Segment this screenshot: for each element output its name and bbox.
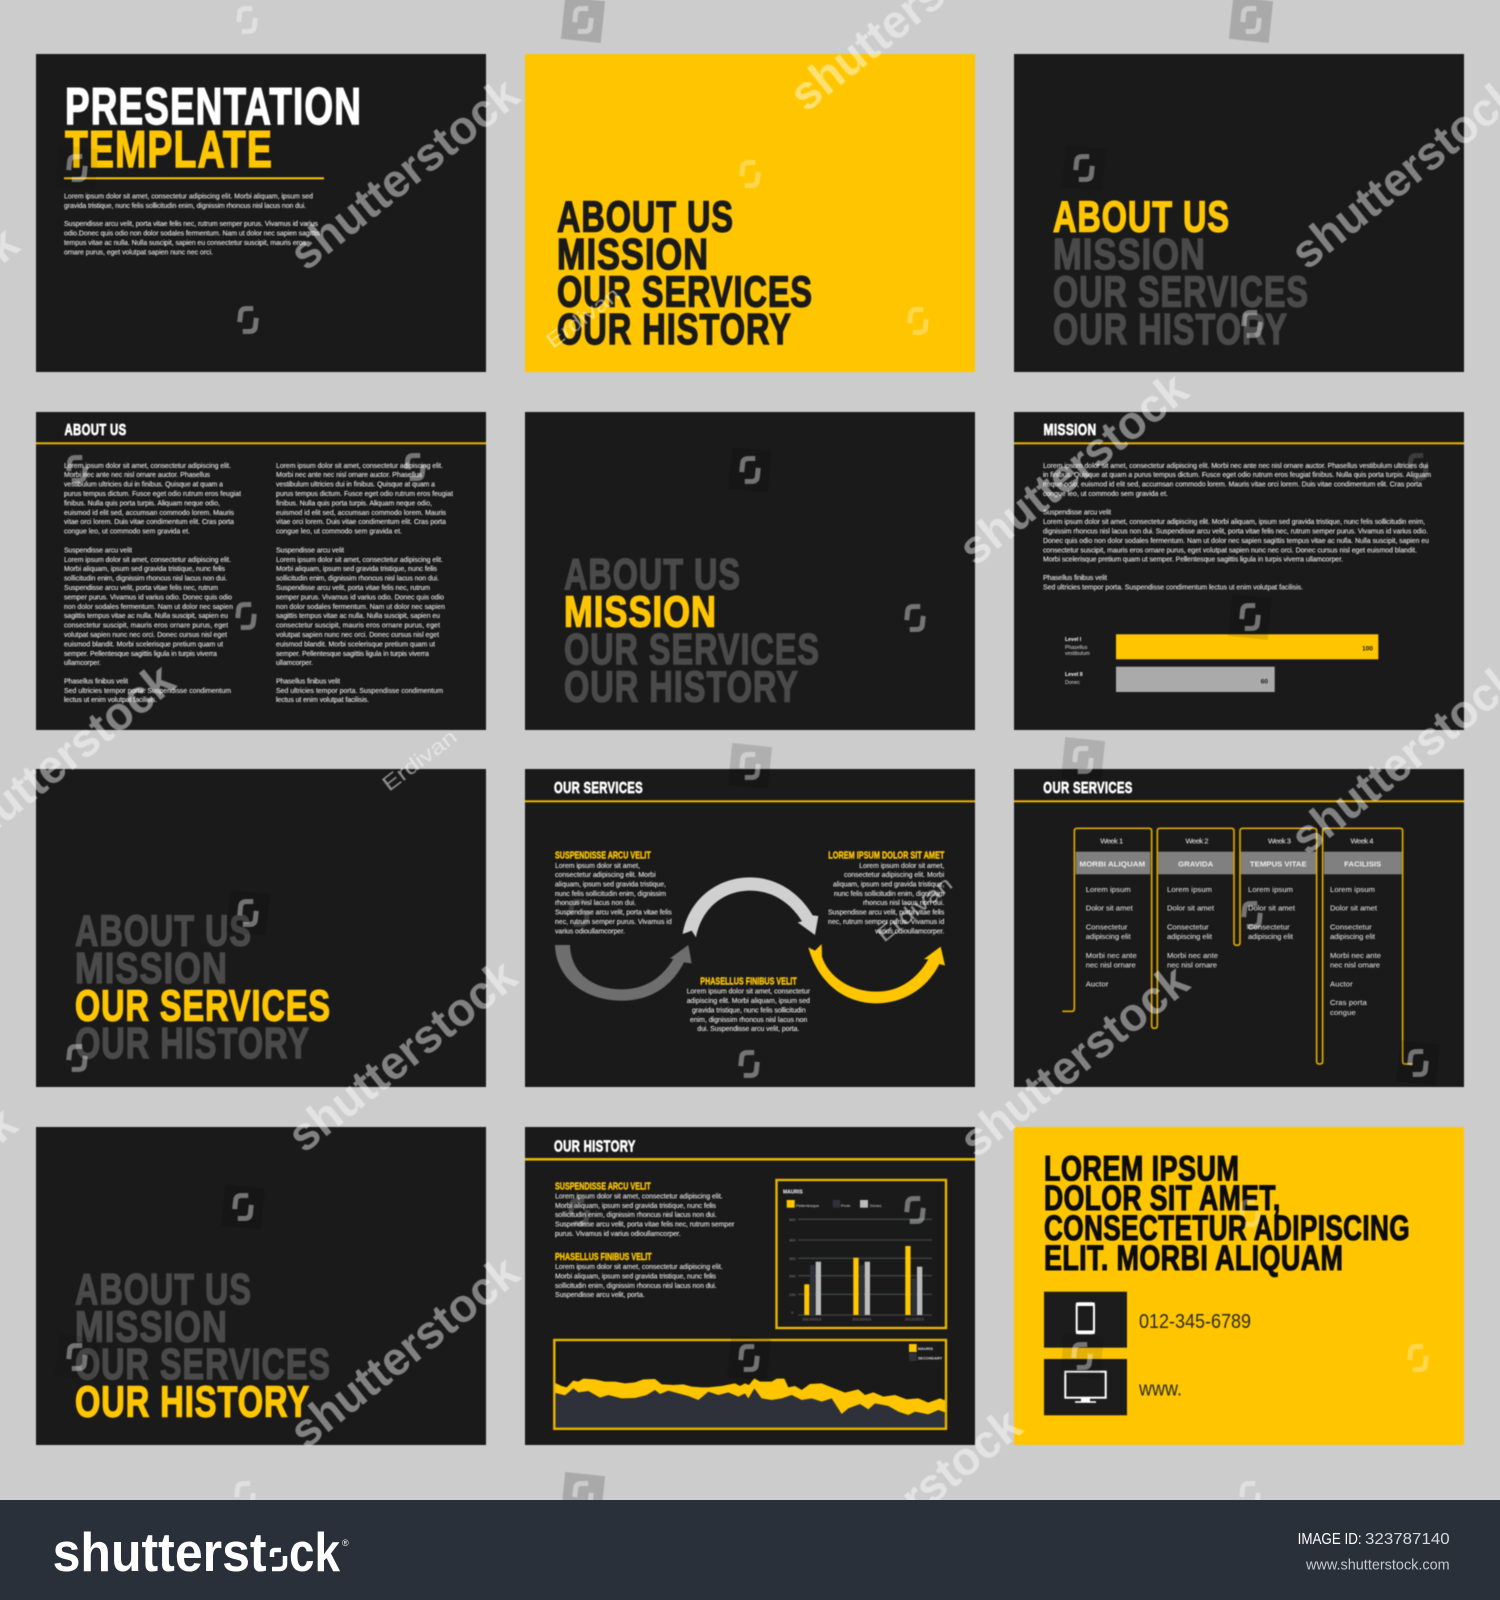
agenda list: MISSION <box>1053 230 1206 279</box>
text column 1: semper. Pellentesque sagittis ligula in turpis viverra <box>64 651 217 658</box>
mission text: Suspendisse arcu velit <box>1043 510 1111 516</box>
footer logo: ® <box>342 1538 349 1548</box>
intro text block: tempus vitae ac nulla. Nulla suscipit, sapien eu consectetur suscipit, mauris eros <box>64 240 307 247</box>
yellow week outline <box>1062 828 1413 1064</box>
text column 2: semper purus. Vivamus id varius odio. Donec quis odio <box>276 594 444 601</box>
mission text: dignissim rhoncus nisl lacus non dui. Suspendisse arcu velit, porta vitae felis nec, rutrum semper purus. Vivamus id varius odio. <box>1043 528 1428 536</box>
mission text: consectetur suscipit, mauris eros ornare purus, eget volutpat sapien nunc nec orci. Donec cursus nisl eget euismod blandit. <box>1043 547 1417 554</box>
agenda list: OUR HISTORY <box>1053 305 1288 354</box>
bar chart: levels: Donec <box>1065 680 1080 686</box>
text block: phasellus: Morbi aliquam, ipsum sed gravida tristique, nunc felis <box>555 1274 717 1280</box>
text block: suspendisse: varius odioullamcorper. <box>555 928 625 936</box>
title: presentation template: TEMPLATE <box>65 121 273 179</box>
text block: phasellus: sollicitudin enim, dignissim rhoncus nisl lacus non dui. <box>555 1283 717 1290</box>
agenda list: OUR SERVICES <box>75 1340 331 1389</box>
text column 2: Morbi aliquam, ipsum sed gravida tristique, nunc felis <box>276 566 438 573</box>
intro text block: gravida tristique, nunc felis sollicitudin enim, dignissim rhoncus nisl lacus non dui. <box>64 203 306 210</box>
bar chart: levels: Level II <box>1065 672 1083 678</box>
bar chart: mauris: 2012/2013 <box>905 1316 925 1322</box>
contact headline: LOREM IPSUM <box>1044 1150 1239 1188</box>
mission text: Sed ultricies tempor porta. Suspendisse condimentum lectus ut enim volutpat facilisis. <box>1043 584 1303 592</box>
text column 1: Lorem ipsum dolor sit amet, consectetur adipiscing elit. <box>64 557 231 564</box>
text block: phasellus: Suspendisse arcu velit, porta. <box>555 1292 645 1299</box>
bar chart: mauris: 100 <box>789 1292 796 1297</box>
text column 1: Morbi nec ante nec nisl ornare auctor. Phasellus <box>64 472 211 479</box>
mission text: Donec quis odio non dolor sodales fermentum. Nam ut dolor nec sapien sagittis tempus vitae ac nulla. Nulla suscipit, sapien eu <box>1043 538 1429 545</box>
panel: agenda our services highlighted <box>36 769 486 1087</box>
agenda list: MISSION <box>75 1302 228 1352</box>
week 1 column: Week 1 <box>1100 836 1123 846</box>
watermark layer: shutterstock <box>277 948 527 1162</box>
week 2 column: Lorem ipsum <box>1167 885 1212 894</box>
agenda list: OUR HISTORY <box>75 1019 310 1068</box>
text column 2: non dolor sodales fermentum. Nam ut dolor nec sapien <box>276 604 445 611</box>
intro text block <box>64 194 321 256</box>
image id: 323787140 <box>1365 1531 1450 1548</box>
watermark layer: shutterstock <box>949 953 1199 1167</box>
text block: phasellus <box>555 1252 723 1299</box>
watermark layer: shutterstock <box>279 66 529 280</box>
image id <box>1298 1531 1450 1548</box>
intro text block: odio.Donec quis odio non dolor sodales fermentum. Nam ut dolor nec sapien sagittis <box>64 230 321 237</box>
grey week header bands <box>1076 852 1402 874</box>
bar chart: levels: 100 <box>1362 645 1373 652</box>
text block: lorem ipsum: aliquam, ipsum sed gravida tristique, <box>833 882 944 888</box>
icon: phone <box>1044 1292 1127 1348</box>
website url: www.shutterstock.com <box>1305 1556 1450 1574</box>
text block: suspendisse: SUSPENDISSE ARCU VELIT <box>555 1182 651 1192</box>
text column 2: congue leo, ut commodo sem gravida et. <box>276 529 402 536</box>
week 4 column: Lorem ipsum <box>1330 885 1375 894</box>
text column 1: euismod id elit sed, accumsan commodo lorem. Mauris <box>64 510 235 517</box>
text block: phasellus <box>687 976 811 1033</box>
panel: agenda our history highlighted <box>36 1127 486 1445</box>
agenda list: ABOUT US <box>75 1265 252 1314</box>
text column 2: euismod blandit. Morbi scelerisque pretium quam ut <box>276 641 435 648</box>
week 4 column: Auctor <box>1330 980 1353 988</box>
text block: suspendisse: nec, rutrum semper purus. Vivamus id <box>555 919 672 926</box>
bar chart: mauris: Pellentesque <box>796 1203 820 1208</box>
week 1 column: MORBI ALIQUAM <box>1079 860 1145 868</box>
icon: monitor <box>1044 1359 1127 1415</box>
bar chart: mauris: 300 <box>789 1256 796 1261</box>
text column 1: Morbi aliquam, ipsum sed gravida tristique, nunc felis <box>64 566 226 573</box>
week 4 column: adipiscing elit <box>1330 932 1376 941</box>
agenda list <box>557 192 813 354</box>
panel: yellow agenda <box>525 54 975 372</box>
text column 2: finibus. Nulla quis porta turpis. Aliquam neque odio, <box>276 500 432 507</box>
week 2 column: GRAVIDA <box>1178 860 1214 868</box>
panel: agenda mission highlighted <box>525 412 975 730</box>
text column 2: consectetur suscipit, mauris eros ornare purus, eget <box>276 623 440 630</box>
agenda list: OUR SERVICES <box>557 268 813 316</box>
panel: presentation template cover <box>36 54 486 372</box>
image id: IMAGE ID: <box>1298 1531 1362 1548</box>
text column 1: semper purus. Vivamus id varius odio. Donec quis odio <box>64 594 232 601</box>
text column 2: lectus ut enim volutpat facilisis. <box>276 697 369 704</box>
text block: phasellus: Lorem ipsum dolor sit amet, consectetur adipiscing elit. <box>555 1264 723 1271</box>
week 3 column: Consectetur <box>1248 922 1290 932</box>
mission text <box>1043 463 1431 592</box>
week 2 column: adipiscing elit <box>1167 932 1213 941</box>
week 3 column: Lorem ipsum <box>1248 885 1293 894</box>
heading: mission: MISSION <box>1044 422 1096 439</box>
week 1 column <box>1079 836 1145 988</box>
text block: suspendisse <box>555 850 672 936</box>
watermark layer: Erdivan <box>542 283 625 353</box>
text block: phasellus: Lorem ipsum dolor sit amet, consectetur <box>687 988 811 996</box>
text column 1: euismod blandit. Morbi scelerisque pretium quam ut <box>64 641 223 648</box>
week 3 column: TEMPUS VITAE <box>1250 860 1307 868</box>
agenda list <box>564 550 820 712</box>
week 4 column: Dolor sit amet <box>1330 904 1378 912</box>
text column 1: ullamcorper. <box>64 660 101 667</box>
week 3 column: Week 3 <box>1268 836 1291 846</box>
text column 2 <box>276 463 453 704</box>
intro text block: Suspendisse arcu velit, porta vitae felis nec, rutrum semper purus. Vivamus id varius <box>64 221 319 228</box>
watermark layer: shutterstock <box>279 1244 529 1458</box>
text column 2: sollicitudin enim, dignissim rhoncus nisl lacus non dui. <box>276 576 439 583</box>
bar chart: mauris: MAURIS <box>783 1190 803 1196</box>
text block: phasellus: gravida tristique, nunc felis sollicitudin <box>692 1008 806 1014</box>
bar chart: mauris: 200 <box>789 1273 796 1278</box>
text column 2: volutpat sapien nunc nec orci. Donec cursus nisl eget <box>276 632 439 639</box>
bar chart: mauris: 400 <box>789 1238 796 1242</box>
text block: suspendisse: SUSPENDISSE ARCU VELIT <box>555 850 651 862</box>
week 1 column: Dolor sit amet <box>1086 904 1134 912</box>
footer logo: shutterst <box>53 1521 267 1583</box>
text column 2: ullamcorper. <box>276 660 313 667</box>
arrow: yellow cycle arc <box>808 944 945 1003</box>
bar chart: mauris: 2012/2013 <box>852 1316 872 1322</box>
text column 2: vitae orci lorem. Duis vitae condimentum elit. Cras porta <box>276 519 446 526</box>
week 2 column <box>1167 836 1218 970</box>
text column 2: euismod id elit sed, accumsan commodo lorem. Mauris <box>276 510 447 517</box>
mission text: Morbi scelerisque pretium quam ut semper. Pellentesque sagittis ligula in turpis viverra ullamcorper. <box>1043 557 1343 564</box>
agenda list: ABOUT US <box>75 906 252 956</box>
text block: lorem ipsum: nec, rutrum semper purus. Vivamus id <box>828 919 944 926</box>
panel: mission <box>1014 412 1464 730</box>
text block: lorem ipsum: Suspendisse arcu velit, porta vitae felis <box>828 910 945 916</box>
agenda list <box>75 1265 331 1426</box>
agenda list: ABOUT US <box>557 192 734 242</box>
text block: phasellus: PHASELLUS FINIBUS VELIT <box>555 1252 652 1263</box>
area chart: MAURIS <box>918 1347 933 1351</box>
text column 1: consectetur suscipit, mauris eros ornare purus, eget <box>64 623 228 630</box>
agenda list: OUR HISTORY <box>564 662 799 712</box>
text column 2: Lorem ipsum dolor sit amet, consectetur adipiscing elit. <box>276 463 443 470</box>
text column 1: non dolor sodales fermentum. Nam ut dolor nec sapien <box>64 604 233 611</box>
week 4 column <box>1330 836 1381 1017</box>
week 1 column: nec nisl ornare <box>1086 960 1136 970</box>
text column 1: Suspendisse arcu velit, porta vitae felis nec, rutrum <box>64 585 218 592</box>
watermark layer: Erdivan <box>378 725 461 796</box>
heading: our services: OUR SERVICES <box>554 780 643 797</box>
watermark layer: shutterstock <box>948 361 1198 575</box>
week 4 column: nec nisl ornare <box>1330 960 1380 970</box>
agenda list: MISSION <box>557 230 709 279</box>
week 1 column: adipiscing elit <box>1086 932 1132 941</box>
week 4 column: congue <box>1330 1008 1356 1017</box>
week 1 column: Lorem ipsum <box>1086 885 1131 894</box>
week 4 column: Cras porta <box>1330 998 1367 1007</box>
text block: suspendisse: Lorem ipsum dolor sit amet, consectetur adipiscing elit. <box>555 1194 723 1200</box>
text block: suspendisse: rhoncus nisl lacus non dui. <box>555 900 636 907</box>
text column 1: sagittis tempus vitae ac nulla. Nulla suscipit, sapien eu <box>64 613 228 620</box>
week 4 column: Consectetur <box>1330 922 1372 932</box>
week 3 column: adipiscing elit <box>1248 932 1294 941</box>
text block: lorem ipsum <box>828 850 945 936</box>
panel: our history charts <box>525 1127 975 1445</box>
text block: lorem ipsum: Lorem ipsum dolor sit amet, <box>859 863 944 870</box>
agenda list <box>1053 192 1309 354</box>
text block: suspendisse: purus. Vivamus id varius odioullamcorper. <box>555 1231 681 1238</box>
week 4 column: FACILISIS <box>1344 860 1381 868</box>
text block: phasellus: adipiscing elit. Morbi aliquam, ipsum sed <box>687 998 810 1005</box>
text block: lorem ipsum: varius odioullamcorper. <box>875 928 944 936</box>
week 3 column: Dolor sit amet <box>1248 904 1296 912</box>
agenda list: OUR HISTORY <box>557 305 792 354</box>
text block: phasellus: PHASELLUS FINIBUS VELIT <box>700 976 797 988</box>
text column 2: vestibulum ultricies dui in finibus. Quisque at quam a <box>276 482 435 489</box>
arrow: dark grey cycle arc <box>555 945 692 1001</box>
mission text: Lorem ipsum dolor sit amet, consectetur adipiscing elit. Morbi nec ante nec nisl ornare auctor. Phasellus vestibulum ultricies dui <box>1043 463 1428 470</box>
title: presentation template <box>65 78 362 179</box>
text column 1: volutpat sapien nunc nec orci. Donec cursus nisl eget <box>64 632 227 639</box>
text block: lorem ipsum: rhoncus nisl lacus non dui. <box>863 900 944 907</box>
bar chart: levels <box>1065 634 1378 692</box>
bar chart: mauris: 0 <box>791 1310 794 1315</box>
heading: our services: OUR SERVICES <box>1043 780 1133 797</box>
text column 1: finibus. Nulla quis porta turpis. Aliquam neque odio, <box>64 500 220 507</box>
mission text: congue leo, ut commodo sem gravida et. <box>1043 491 1168 498</box>
title: presentation template: PRESENTATION <box>65 78 362 136</box>
panel: about us two columns <box>36 412 486 730</box>
area chart: SECONDARY <box>918 1356 943 1360</box>
arrow: light grey cycle arc <box>683 877 818 937</box>
text column 1: Sed ultricies tempor porta. Suspendisse condimentum <box>64 688 231 695</box>
text block: suspendisse: Lorem ipsum dolor sit amet, <box>555 863 640 870</box>
text column 1: purus tempus dictum. Fusce eget odio rutrum eros feugiat <box>64 491 241 498</box>
text column 1: Suspendisse arcu velit <box>64 548 132 554</box>
agenda list: MISSION <box>564 588 717 636</box>
text column 2: Morbi nec ante nec nisl ornare auctor. Phasellus <box>276 472 423 479</box>
contact headline: ELIT. MORBI ALIQUAM <box>1044 1239 1343 1278</box>
text column 1: Phasellus finibus velit <box>64 678 128 686</box>
text block: suspendisse: sollicitudin enim, dignissim rhoncus nisl lacus non dui. <box>555 1212 717 1219</box>
text block: suspendisse: Suspendisse arcu velit, porta vitae felis <box>555 910 672 916</box>
text column 1: lectus ut enim volutpat facilisis. <box>64 697 157 704</box>
contact headline <box>1044 1150 1410 1278</box>
text column 1: congue leo, ut commodo sem gravida et. <box>64 529 190 536</box>
contact headline: DOLOR SIT AMET, <box>1044 1179 1281 1218</box>
text block: suspendisse <box>555 1182 735 1238</box>
agenda list <box>75 906 331 1068</box>
week 3 column <box>1248 836 1307 941</box>
website: www. <box>1138 1379 1182 1401</box>
agenda list: OUR SERVICES <box>564 625 820 674</box>
bar chart: mauris: 2012/2013 <box>802 1316 822 1322</box>
heading: about us: ABOUT US <box>64 422 126 439</box>
footer logo: ck <box>289 1521 340 1583</box>
week 4 column: Week 4 <box>1350 836 1374 846</box>
text column 2: purus tempus dictum. Fusce eget odio rutrum eros feugiat <box>276 491 453 498</box>
text block: suspendisse: Morbi aliquam, ipsum sed gravida tristique, nunc felis <box>555 1203 717 1210</box>
text column 1: sollicitudin enim, dignissim rhoncus nisl lacus non dui. <box>64 576 227 583</box>
phone number: 012-345-6789 <box>1139 1311 1251 1333</box>
mission text: Phasellus finibus velit <box>1043 575 1107 582</box>
text block: suspendisse: aliquam, ipsum sed gravida tristique, <box>555 882 666 888</box>
agenda list: OUR HISTORY <box>75 1378 310 1426</box>
bar chart: levels: Phasellus <box>1065 645 1088 651</box>
week 2 column: Dolor sit amet <box>1167 904 1215 912</box>
week 2 column: nec nisl ornare <box>1167 960 1217 970</box>
text column 2: Suspendisse arcu velit, porta vitae felis nec, rutrum <box>276 585 430 592</box>
panel: our services cycle <box>525 769 975 1087</box>
text column 1: vitae orci lorem. Duis vitae condimentum elit. Cras porta <box>64 519 234 526</box>
bar chart: mauris: Donec <box>870 1203 882 1208</box>
text column 2: Sed ultricies tempor porta. Suspendisse condimentum <box>276 688 443 695</box>
panel: yellow contact <box>1014 1127 1464 1445</box>
text column 2: Lorem ipsum dolor sit amet, consectetur adipiscing elit. <box>276 557 443 564</box>
agenda list: ABOUT US <box>1053 192 1230 242</box>
text column 2: sagittis tempus vitae ac nulla. Nulla suscipit, sapien eu <box>276 613 440 620</box>
mission text: neque odio, euismod id elit sed, accumsan commodo lorem. Mauris vitae orci lorem. Duis vitae condimentum elit. Cras porta <box>1043 482 1422 489</box>
text column 2: Suspendisse arcu velit <box>276 548 344 554</box>
text column 1: vestibulum ultricies dui in finibus. Quisque at quam a <box>64 482 223 489</box>
text block: lorem ipsum: consectetur adipiscing elit. Morbi <box>844 872 945 879</box>
text column 2: Phasellus finibus velit <box>276 678 340 686</box>
bar chart: mauris <box>776 1180 946 1328</box>
mission text: in finibus. Quisque at quam a purus tempus dictum. Fusce eget odio rutrum eros feugiat finibus. Nulla quis porta turpis. Aliquam <box>1043 472 1431 479</box>
text block: lorem ipsum: nunc felis sollicitudin enim, dignissim <box>834 891 945 898</box>
text column 1: Lorem ipsum dolor sit amet, consectetur adipiscing elit. <box>64 463 231 470</box>
watermark layer: Erdivan <box>873 872 957 947</box>
bar chart: levels: Level I <box>1065 637 1082 643</box>
week 2 column: Consectetur <box>1167 922 1209 932</box>
heading: our history: OUR HISTORY <box>554 1139 636 1156</box>
text block: suspendisse: consectetur adipiscing elit. Morbi <box>555 872 656 879</box>
week 1 column: Morbi nec ante <box>1086 951 1137 960</box>
bar chart: levels: vestibulum <box>1065 651 1090 657</box>
bar chart: levels: 60 <box>1261 678 1268 685</box>
week 2 column: Week 2 <box>1186 836 1208 846</box>
week 1 column: Auctor <box>1086 980 1109 988</box>
week 4 column: Morbi nec ante <box>1330 951 1381 960</box>
intro text block: ornare purus, eget volutpat sapien nunc nec orci. <box>64 250 213 256</box>
panel: our services weekly columns <box>1014 769 1464 1087</box>
agenda list: OUR SERVICES <box>1053 268 1309 316</box>
footer bar <box>0 1500 1500 1600</box>
bar chart: mauris: 500 <box>789 1217 796 1222</box>
week 2 column: Morbi nec ante <box>1167 951 1218 960</box>
text block: phasellus: dui. Suspendisse arcu velit, porta. <box>697 1026 799 1033</box>
agenda list: MISSION <box>75 944 228 993</box>
week 1 column: Consectetur <box>1086 922 1128 932</box>
text block: suspendisse: Suspendisse arcu velit, porta vitae felis nec, rutrum semper <box>555 1222 735 1228</box>
agenda list: OUR SERVICES <box>75 982 331 1030</box>
intro text block: Lorem ipsum dolor sit amet, consectetur adipiscing elit. Morbi aliquam, ipsum sed <box>64 194 313 200</box>
panel: agenda about us highlighted <box>1014 54 1464 372</box>
mission text: Lorem ipsum dolor sit amet, consectetur adipiscing elit. Morbi aliquam, ipsum sed gravida tristique, nunc felis sollicitudin enim, <box>1043 519 1425 526</box>
text column 1 <box>64 463 241 704</box>
area chart <box>554 1340 946 1429</box>
agenda list: ABOUT US <box>564 550 741 599</box>
text block: phasellus: enim, dignissim rhoncus nisl lacus non <box>690 1017 807 1024</box>
text column 2: semper. Pellentesque sagittis ligula in turpis viverra <box>276 651 429 658</box>
text block: suspendisse: nunc felis sollicitudin enim, dignissim <box>555 891 666 898</box>
text block: lorem ipsum: LOREM IPSUM DOLOR SIT AMET <box>828 850 944 862</box>
bar chart: mauris: Proin <box>841 1203 850 1208</box>
